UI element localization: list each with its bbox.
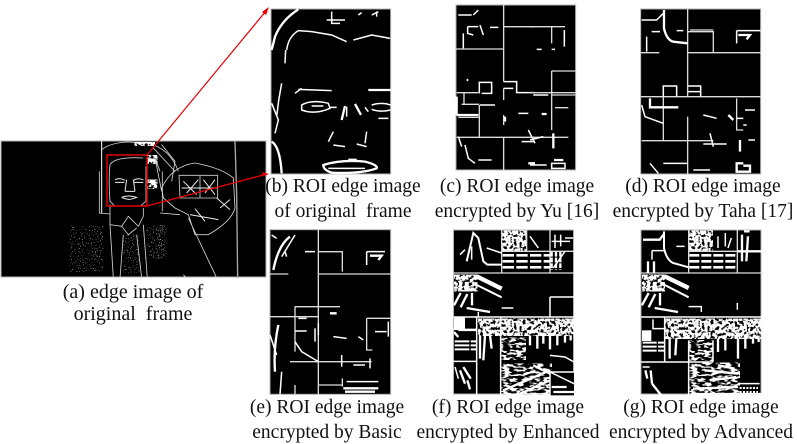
caption c: (c) ROI edge image xyxy=(440,176,594,197)
caption g: encrypted by Advanced xyxy=(609,422,793,443)
caption b: (b) ROI edge image xyxy=(265,176,421,197)
caption f: encrypted by Enhanced xyxy=(416,422,600,443)
panel c: ROI edge image encrypted by Yu xyxy=(456,5,576,170)
panel e: ROI edge image encrypted by Basic xyxy=(270,230,391,394)
caption f: (f) ROI edge image xyxy=(432,397,584,418)
caption c: encrypted by Yu [16] xyxy=(435,201,599,222)
panel f: ROI edge image encrypted by Enhanced xyxy=(453,230,574,395)
caption d: (d) ROI edge image xyxy=(625,176,781,197)
caption e: encrypted by Basic xyxy=(252,422,402,443)
red arrow to bottom-left of ROI image xyxy=(147,172,269,206)
panel g: ROI edge image encrypted by Advanced xyxy=(641,230,762,395)
caption a: (a) edge image of xyxy=(63,281,204,303)
panel d: ROI edge image encrypted by Taha xyxy=(641,9,761,174)
red region of interest box xyxy=(107,155,147,206)
panel b: ROI edge image of original frame xyxy=(271,9,391,174)
caption g: (g) ROI edge image xyxy=(623,397,779,418)
panel a: edge image of original frame xyxy=(1,141,266,278)
red arrow to top-left of ROI image xyxy=(147,7,269,155)
caption e: (e) ROI edge image xyxy=(250,397,404,418)
caption b: of original frame xyxy=(274,201,412,222)
caption d: encrypted by Taha [17] xyxy=(613,201,793,222)
caption a: original frame xyxy=(74,303,193,325)
